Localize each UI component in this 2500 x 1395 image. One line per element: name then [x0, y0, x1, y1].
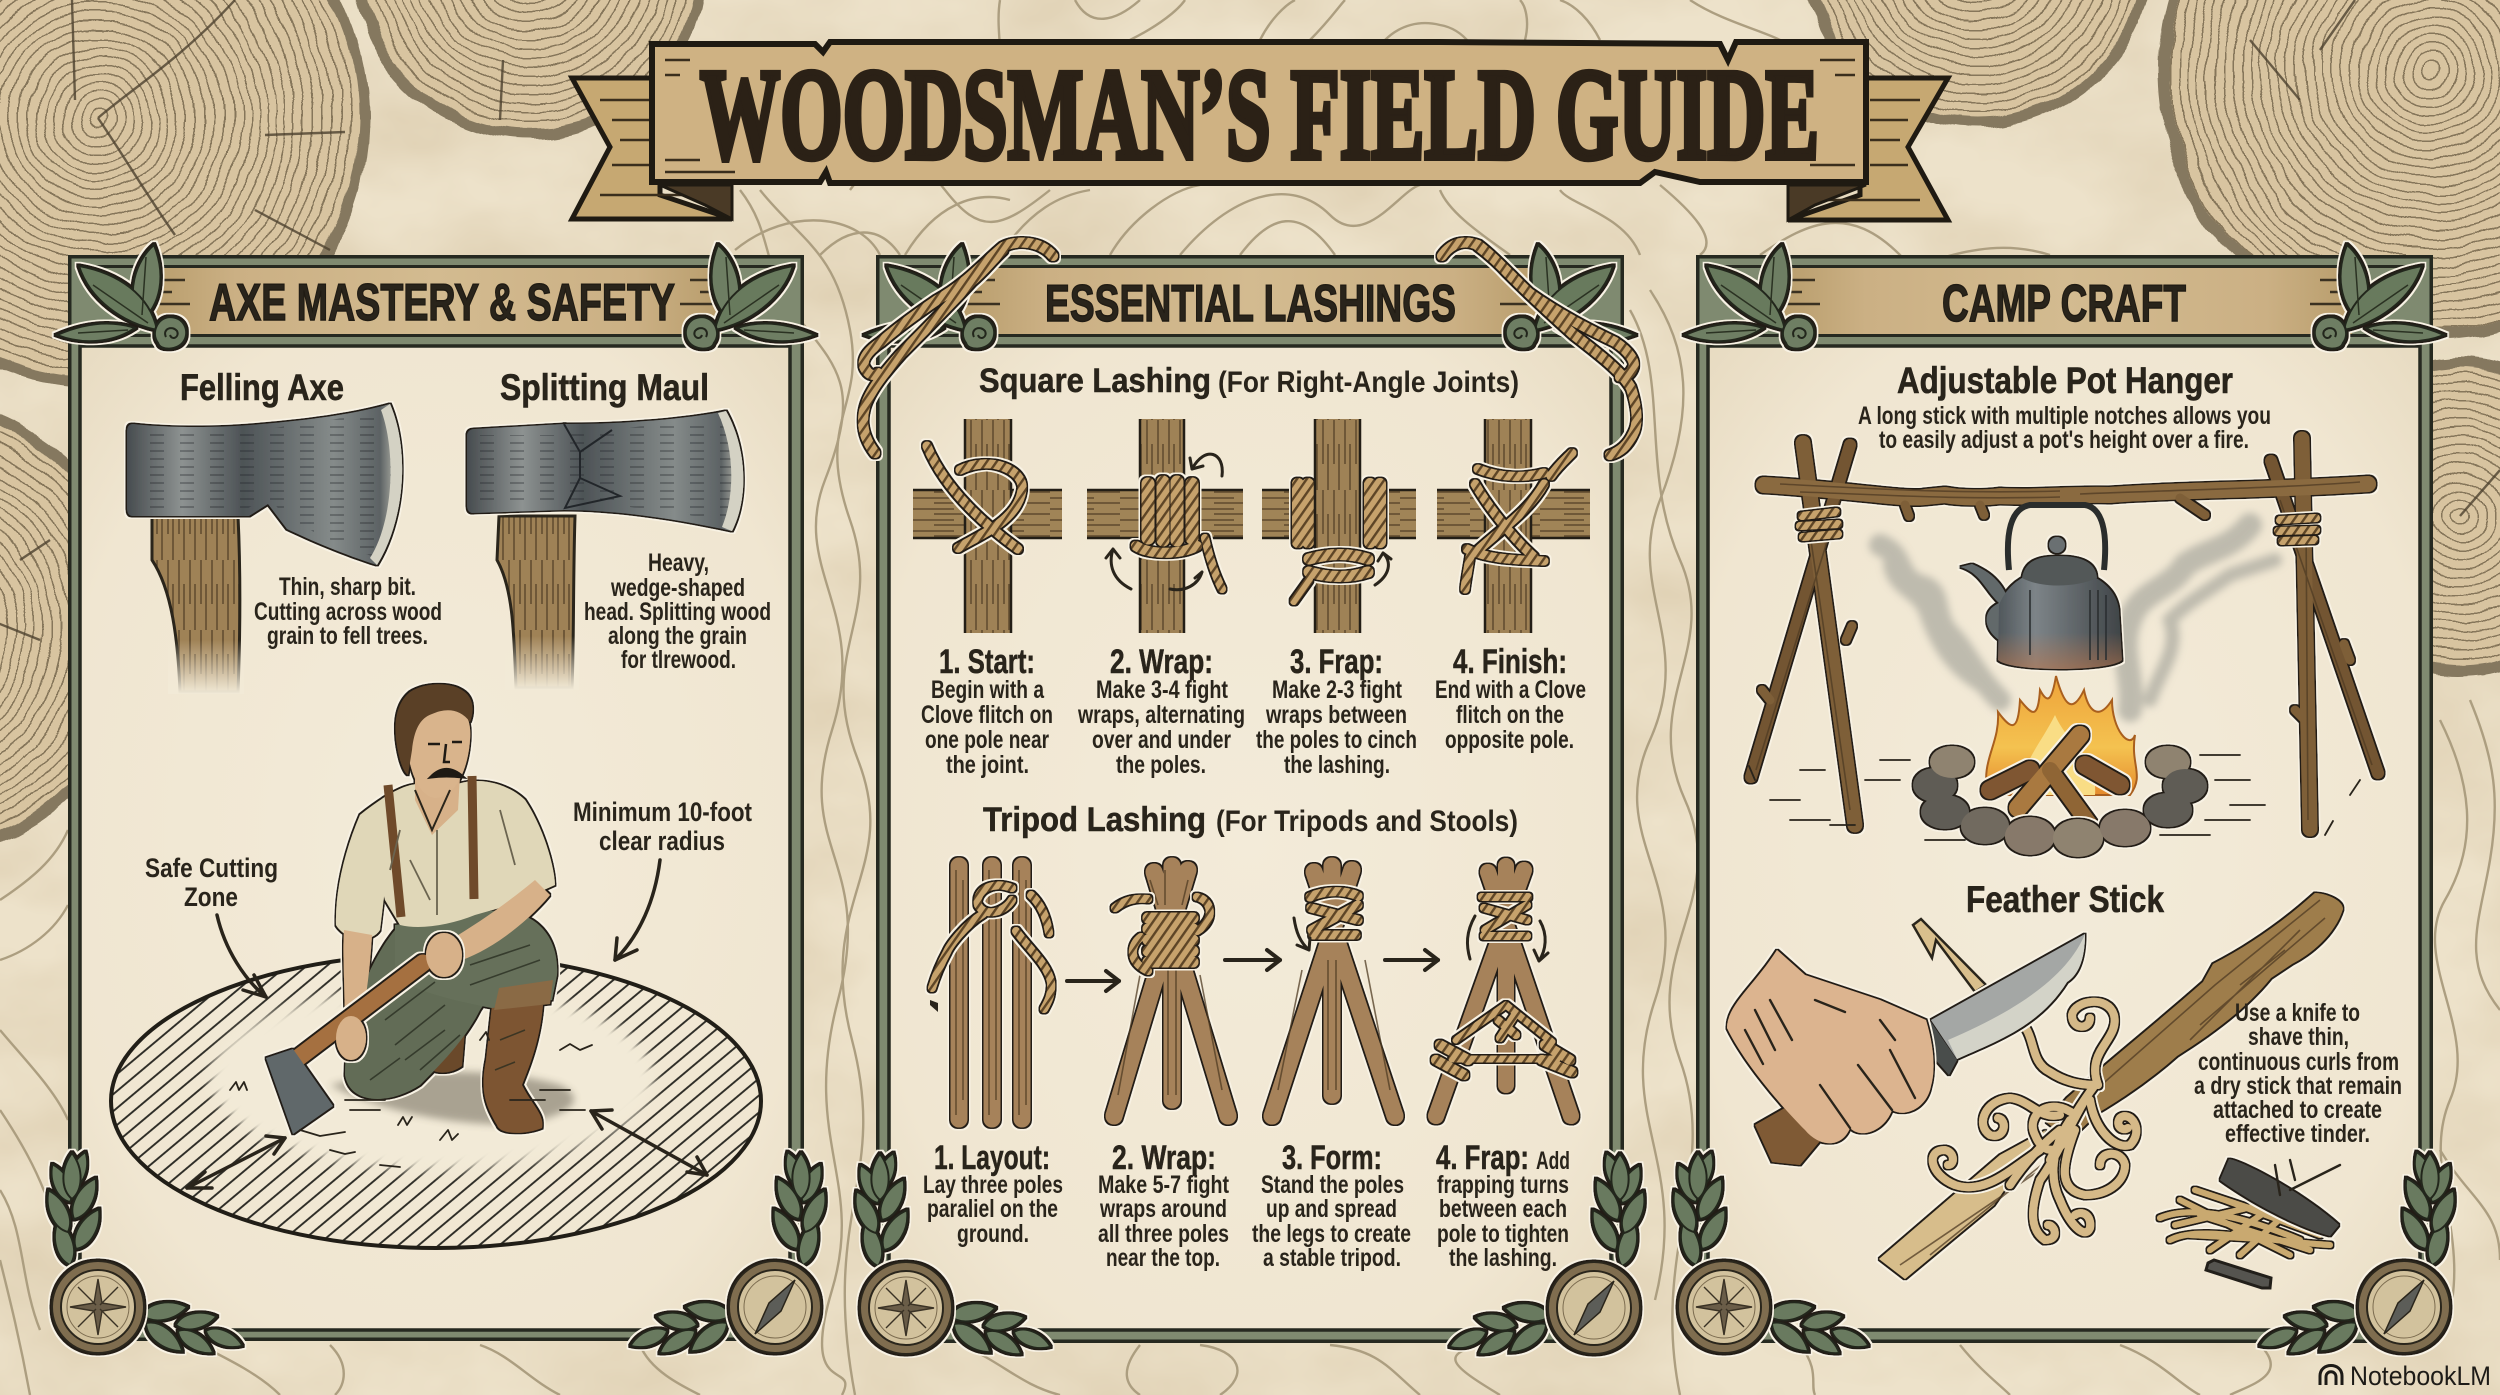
heading: tripod lashing: Tripod Lashing	[983, 801, 1206, 839]
decorative leaves: header corners	[1685, 245, 2444, 349]
illustration: tripod step 4	[1436, 866, 1572, 1116]
text: feather stick description: shave thin,	[2248, 1023, 2349, 1051]
compass: bottom right	[2257, 1150, 2461, 1360]
icon: kettle	[1960, 505, 2122, 669]
icon: axe in woodsman's hand	[266, 933, 462, 1134]
illustration: square lashing step 1	[913, 419, 1062, 633]
heading: tripod lashing: (For Tripods and Stools)	[1216, 805, 1518, 838]
title banner	[572, 42, 1948, 220]
logs	[1990, 735, 2120, 825]
text: tripod lashing steps: 1. Layout:	[934, 1139, 1050, 1177]
text: feather stick description: continuous curls from	[2198, 1048, 2399, 1076]
text: square lashing steps: 4. Finish:	[1453, 643, 1567, 681]
header plaque: essential lashings	[886, 265, 1614, 337]
text: square lashing steps: Clove flitch on	[921, 701, 1053, 729]
text: square lashing steps: the poles.	[1116, 751, 1206, 779]
icon: splitting maul	[467, 411, 743, 690]
illustration: tripod step 2	[1114, 866, 1228, 1116]
text: felling axe description: Cutting across wood	[254, 598, 442, 626]
rope: top right	[1442, 243, 1637, 455]
text: tripod lashing steps: a stable tripod.	[1263, 1244, 1401, 1272]
text: splitting maul description: wedge-shaped	[610, 574, 745, 602]
text: splitting maul description: Heavy,	[648, 549, 709, 577]
text: tripod lashing steps: ground.	[957, 1220, 1029, 1248]
text: square lashing steps: over and under	[1092, 726, 1231, 754]
text: tripod lashing steps: wraps around	[1099, 1195, 1227, 1223]
label: minimum 10-foot clear radius: clear radius	[599, 826, 725, 856]
ground tufts	[230, 1032, 592, 1167]
icon: feather stick with curls	[1879, 893, 2343, 1279]
heading: feather stick: Feather Stick	[1966, 879, 2164, 920]
arrow: tripod step 1 to 2	[1067, 971, 1119, 991]
decorative leaves: header corners	[57, 245, 815, 349]
label: safe cutting zone	[145, 853, 278, 912]
heading: adjustable pot hanger: Adjustable Pot Hanger	[1897, 360, 2233, 401]
compass: bottom right	[628, 1150, 832, 1360]
text: feather stick description	[2194, 999, 2402, 1148]
text: feather stick description: effective tinder.	[2225, 1120, 2370, 1148]
heading: square lashing: Square Lashing	[979, 362, 1211, 400]
text: felling axe description	[254, 573, 442, 650]
heading: splitting maul: Splitting Maul	[500, 367, 709, 408]
text: tripod lashing steps: frapping turns	[1437, 1171, 1569, 1199]
text: tripod lashing steps: Make 5-7 fight	[1098, 1171, 1230, 1199]
header plaque: camp craft: CAMP CRAFT	[1942, 275, 2186, 333]
text: tripod lashing steps: pole to tighten	[1437, 1220, 1569, 1248]
label: minimum 10-foot clear radius: Minimum 10-foot	[573, 797, 752, 827]
text: tripod lashing steps	[923, 1139, 1570, 1272]
text: splitting maul description	[584, 549, 771, 674]
text: feather stick description: a dry stick that remain	[2194, 1072, 2402, 1100]
text: tripod lashing steps: between each	[1439, 1195, 1567, 1223]
icon: tinder bundle	[2160, 1159, 2340, 1255]
header plaque: essential lashings: ESSENTIAL LASHINGS	[1045, 275, 1456, 333]
header plaque: axe mastery	[78, 265, 794, 337]
compass: bottom left	[41, 1150, 245, 1360]
text: square lashing steps: wraps between	[1265, 701, 1407, 729]
text: tripod lashing steps: up and spread	[1266, 1195, 1397, 1223]
panel: essential lashings	[849, 243, 1651, 1361]
illustration: square lashing step 3	[1262, 419, 1416, 633]
text: square lashing steps: 3. Frap:	[1290, 643, 1383, 681]
icon: hand holding knife	[1727, 950, 1934, 1165]
illustration: tripod step 1	[930, 866, 1051, 1119]
compass: bottom left	[849, 1151, 1053, 1361]
text: tripod lashing steps: Add	[1536, 1147, 1570, 1175]
arrow: to safe cutting zone	[217, 915, 266, 997]
text: square lashing steps: 1. Start:	[939, 643, 1035, 681]
panel: axe mastery and safety	[41, 245, 832, 1360]
text: splitting maul description: head. Splitting wood	[584, 598, 771, 626]
heading: felling axe: Felling Axe	[180, 367, 344, 408]
title: WOODSMAN’S FIELD GUIDE	[700, 43, 1819, 187]
rope: top left	[863, 243, 1053, 453]
text: tripod lashing steps: paraliel on the	[927, 1195, 1058, 1223]
text: feather stick description: attached to create	[2213, 1096, 2382, 1124]
heading: tripod lashing	[983, 801, 1518, 839]
text: tripod lashing steps: Stand the poles	[1261, 1171, 1404, 1199]
text: square lashing steps: the lashing.	[1284, 751, 1390, 779]
heading: square lashing: (For Right-Angle Joints)	[1218, 366, 1519, 399]
ribbon tail: right	[1788, 78, 1948, 220]
icon: knife	[1910, 934, 2085, 1075]
ribbon tail: left	[572, 78, 732, 219]
illustration: square lashing step 4	[1437, 419, 1590, 633]
heading: square lashing	[979, 362, 1519, 400]
text: felling axe description: Thin, sharp bit.	[279, 573, 416, 601]
chart: safe cutting zone circle	[111, 954, 761, 1248]
decorative leaves: header corners	[865, 245, 1635, 349]
text: square lashing steps: flitch on the	[1456, 701, 1564, 729]
text: tripod lashing steps: Lay three poles	[923, 1171, 1063, 1199]
header plaque: camp craft	[1706, 265, 2422, 337]
text: square lashing steps: Make 2-3 fight	[1272, 676, 1403, 704]
text: square lashing steps: wraps, alternating	[1077, 701, 1245, 729]
panel: camp craft	[1667, 245, 2461, 1360]
icon: thin stick behind knife	[1913, 919, 1986, 992]
illustration: campfire	[1749, 676, 2360, 857]
stones	[1913, 746, 2207, 857]
icon: felling axe	[127, 404, 402, 694]
text: square lashing steps: Begin with a	[931, 676, 1045, 704]
illustration: square lashing step 2	[1087, 419, 1243, 633]
label: minimum 10-foot clear radius	[573, 797, 752, 856]
illustration: smoke	[1880, 525, 2275, 710]
arrow: right radius measure	[591, 1110, 707, 1175]
text: felling axe description: grain to fell trees.	[267, 622, 428, 650]
text: square lashing steps	[921, 643, 1586, 779]
compass: bottom left	[1667, 1150, 1871, 1360]
text: square lashing steps: Make 3-4 fight	[1096, 676, 1229, 704]
illustration: pot hanger frame	[1751, 439, 2378, 829]
text: square lashing steps: one pole near	[925, 726, 1049, 754]
wood slice cracks	[0, 0, 2500, 640]
text: tripod lashing steps: 3. Form:	[1282, 1139, 1382, 1177]
label: safe cutting zone: Safe Cutting	[145, 853, 278, 883]
arrow: left radius measure	[187, 1136, 285, 1188]
arrow: tripod step 3 to 4	[1385, 950, 1438, 970]
illustration: kneeling woodsman with axe	[330, 684, 574, 1133]
text: pot hanger description: A long stick with multiple notches allows you	[1858, 402, 2271, 430]
text: pot hanger description	[1858, 402, 2271, 454]
text: square lashing steps: the joint.	[946, 751, 1029, 779]
text: pot hanger description: to easily adjust a pot's height over a fire.	[1879, 426, 2249, 454]
watermark: NotebookLM: NotebookLM	[2350, 1361, 2491, 1391]
text: tripod lashing steps: 4. Frap:	[1436, 1139, 1529, 1177]
text: square lashing steps: opposite pole.	[1445, 726, 1574, 754]
text: tripod lashing steps: the legs to create	[1252, 1220, 1411, 1248]
header plaque: axe mastery: AXE MASTERY & SAFETY	[209, 274, 675, 332]
text: feather stick description: Use a knife to	[2235, 999, 2360, 1027]
text: square lashing steps: 2. Wrap:	[1110, 643, 1213, 681]
arrow: tripod step 2 to 3	[1225, 950, 1280, 970]
banner plate	[652, 42, 1866, 183]
icon: fire steel	[2206, 1260, 2271, 1288]
illustration: tripod step 3	[1272, 866, 1395, 1116]
text: splitting maul description: along the grain	[608, 622, 747, 650]
text: tripod lashing steps: the lashing.	[1449, 1244, 1557, 1272]
ground marks	[1749, 755, 2360, 840]
text: tripod lashing steps: near the top.	[1106, 1244, 1220, 1272]
text: square lashing steps: End with a Clove	[1435, 676, 1586, 704]
text: tripod lashing steps: all three poles	[1098, 1220, 1229, 1248]
text: tripod lashing steps: 2. Wrap:	[1112, 1139, 1216, 1177]
text: square lashing steps: the poles to cinch	[1256, 726, 1417, 754]
compass: bottom right	[1447, 1151, 1651, 1361]
text: splitting maul description: for tlrewood.	[621, 646, 736, 674]
arrow: to clear radius	[615, 860, 660, 960]
label: safe cutting zone: Zone	[184, 882, 238, 912]
